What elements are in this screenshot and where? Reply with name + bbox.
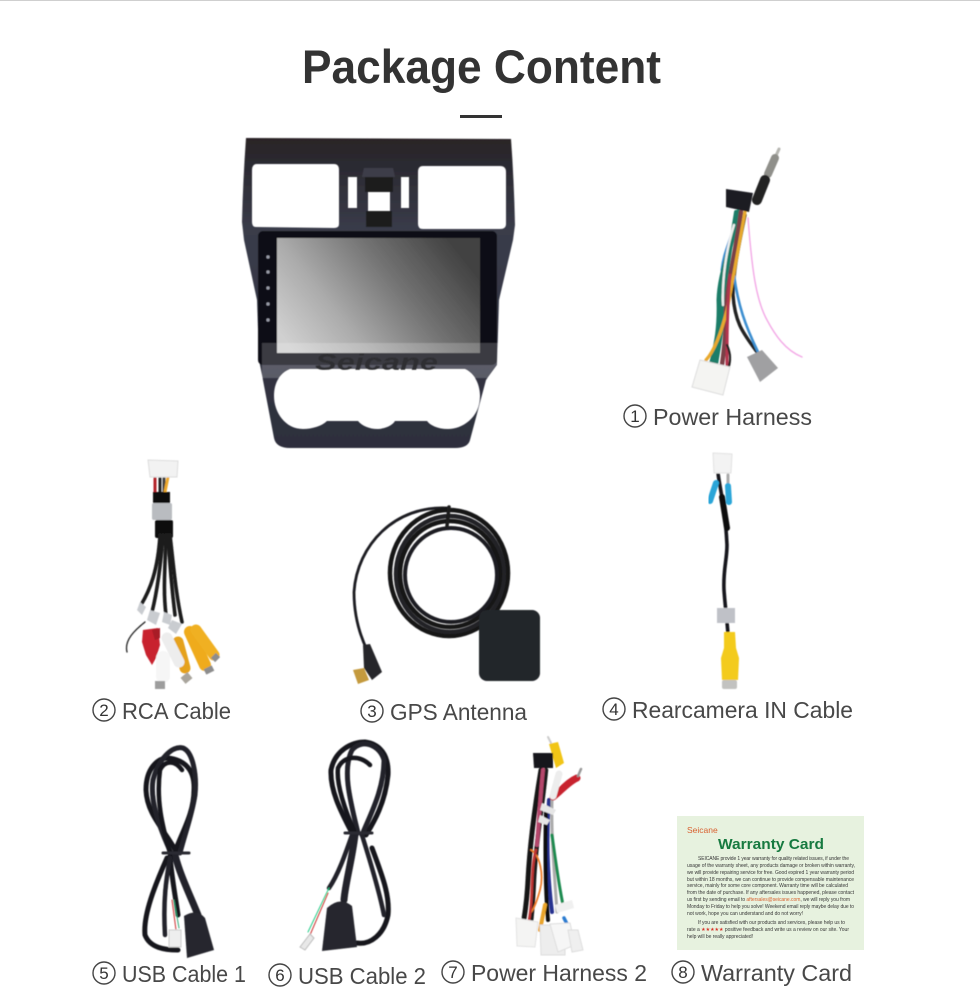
warranty body text: from the date of purchase. If any aftersales issues happened, please contact [687,890,855,896]
warranty body text: Monday to Friday to help you solve! Weekend email reply maybe delay due to [687,904,854,910]
label: warranty card: Warranty Card [701,960,852,986]
warranty brand: Seicane [687,825,718,835]
label: USB cable 1: USB Cable 1 [122,961,246,987]
warranty body text [687,856,855,940]
label: GPS antenna: GPS Antenna [390,699,528,725]
warranty body text: If you are satisfied with our products and services, please help us to [698,920,845,926]
label: RCA cable: 2 [99,701,109,720]
warranty body text: usage of the warranty sheet, any products damage or broken within warranty, [687,863,855,869]
label: GPS antenna: 3 [367,702,377,721]
label: warranty card: 8 [678,963,688,982]
warranty body text: not work, hope you can understand and do not worry! [687,911,803,917]
label: power harness 2: Power Harness 2 [471,960,647,986]
label: RCA cable: RCA Cable [122,698,231,724]
power harness 2 photo [516,737,583,955]
title: Package Content [302,40,661,93]
power harness photo [692,149,802,395]
rearcamera cable photo [710,453,739,689]
warranty body text: SEICANE provide 1 year warranty for quality related issues, if under the [698,856,849,862]
label: rearcamera cable: Rearcamera IN Cable [632,697,853,723]
USB cable 2 photo [300,742,388,951]
title underline [460,115,502,118]
warranty body text: we will provide repairing service for free. Good expired 1 year warranty period [687,870,854,876]
label: USB cable 2: USB Cable 2 [298,963,426,989]
label: power harness: 1 [630,407,640,426]
watermark: Seicane [315,349,438,375]
head unit product photo [242,138,515,448]
label: power harness: Power Harness [653,404,812,430]
warranty heading: Warranty Card [718,836,824,853]
RCA cable photo [126,460,218,689]
warranty body text: us first by sending email to aftersales@seicane.com, we will reply you from [687,897,850,903]
label: USB cable 1: 5 [99,964,109,983]
top rule [0,0,980,1]
label: USB cable 2: 6 [275,966,285,985]
label: rearcamera cable: 4 [609,700,619,719]
warranty body text: rate a ★★★★★ positive feedback and write us a review on our site. Your [687,927,849,933]
USB cable 1 photo [145,748,214,958]
warranty card [677,816,864,950]
label: power harness 2: 7 [448,963,458,982]
warranty body text: help will be really appreciated! [687,934,753,940]
warranty body text: service, mainly for some core component. Warranty time will be calculated [687,883,848,889]
GPS antenna photo [353,507,540,684]
warranty body text: but within 18 months, we can continue to provide compensable maintenance [687,877,854,883]
